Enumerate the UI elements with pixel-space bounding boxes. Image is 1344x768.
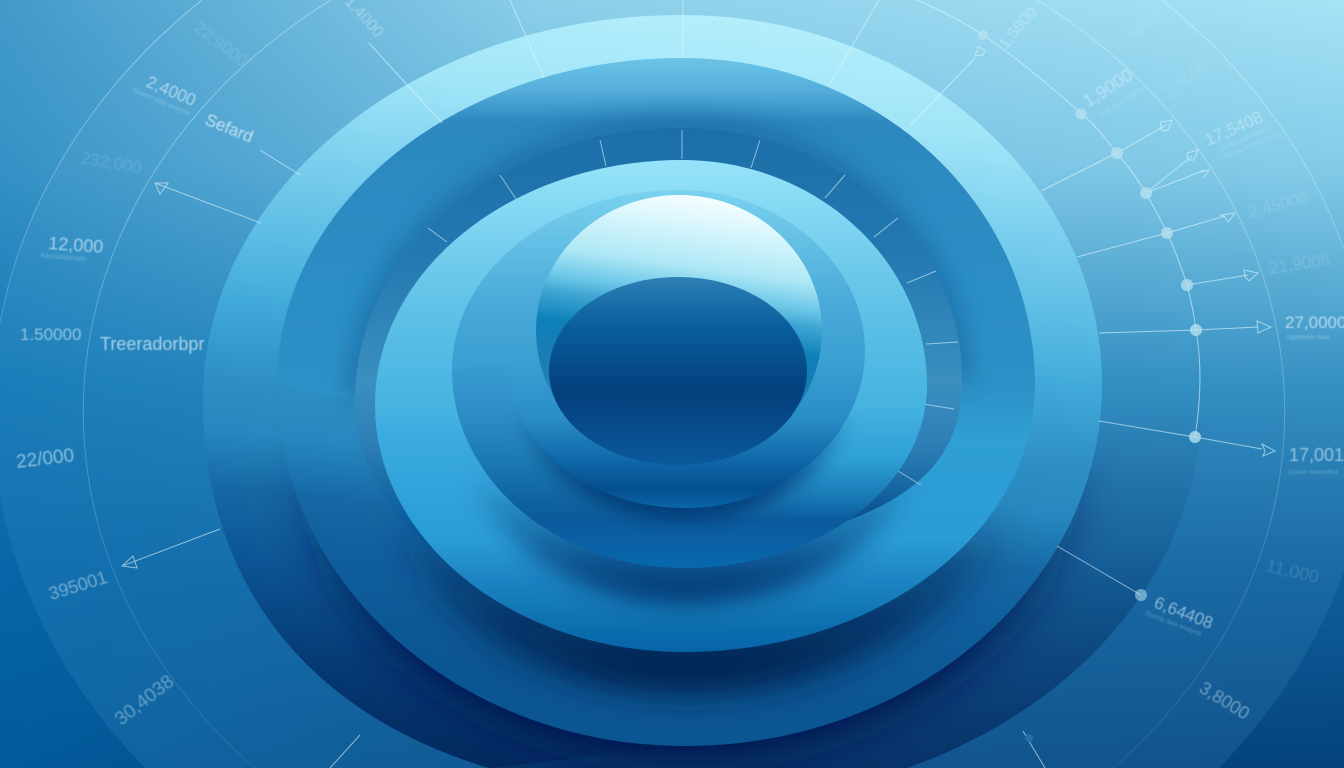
right value labels (1079, 5, 1344, 724)
label 2,4000: Reason data analysis (131, 87, 192, 118)
lower left crescent of layer 3 (452, 355, 685, 568)
label 11,000 faint: 11,000 (1264, 555, 1321, 587)
connector lines (1041, 125, 1262, 595)
top value labels (341, 0, 1041, 53)
layer 4: inner ribbon (452, 190, 865, 508)
left value labels (15, 18, 256, 730)
label 27,0000 (1285, 313, 1344, 341)
label 17,5408: 17,5408 (1202, 107, 1266, 150)
label 17,0011: Cause eventsfirst (1288, 469, 1338, 476)
label 17,5408: Cause data analysis (1224, 130, 1281, 161)
label 17,5408 (1202, 104, 1281, 165)
label Treeradorbpr: Treeradorbpr (100, 334, 204, 354)
lower left arrow (122, 529, 220, 568)
outer band edge lines (0, 0, 1344, 323)
groove top shadow (345, 114, 972, 400)
label 1,5800 top right: 1,5800 (996, 4, 1041, 53)
label 232,000 faint: 232,000 (79, 148, 143, 178)
dark groove ring (355, 128, 962, 556)
lower dark spiral band (203, 400, 1202, 768)
label 2,45008 faint: 2,45008 (1246, 188, 1310, 222)
connector to Sefard label (260, 150, 300, 175)
label 6,64408: 6,64408 (1152, 593, 1216, 633)
label 12,000: Rasoudatanaps (40, 253, 87, 263)
label 395001: 395001 (46, 567, 110, 604)
layer 2: medium ribbon (277, 58, 1035, 652)
faint top label: 1,5000 (1112, 5, 1164, 53)
label 17,0011 (1288, 445, 1344, 476)
dark sphere core (549, 277, 807, 465)
label 27,0000: Upstream data (1287, 334, 1330, 341)
label 30,4038: 30,4038 (111, 671, 178, 730)
top radial lines (369, 0, 975, 126)
label 2,4000 (131, 68, 200, 118)
label Sefard: Sefard (203, 110, 256, 146)
bottom connector (330, 731, 1045, 768)
label 1,9000 (1079, 62, 1147, 122)
layer 3: bright ribbon (375, 160, 927, 568)
label 1,9000: 1,9000 (1079, 65, 1136, 111)
label 22,9000 faint top: 22,9000 (191, 18, 251, 70)
timeline curve (917, 0, 1200, 437)
left connector lines and arrows (122, 150, 300, 568)
data dots (978, 30, 1202, 601)
label 1,9000: Sub data analysis (1099, 84, 1147, 118)
layer 4 cast shadow (508, 362, 865, 520)
central sphere (536, 195, 822, 467)
upper left arrow (155, 183, 261, 223)
layer 3 cast shadow (452, 406, 927, 604)
label 1.50000: 1.50000 (20, 325, 81, 344)
label 17,5408: Cause data analysis (1218, 123, 1275, 153)
right timeline with dots and arrows (917, 0, 1275, 601)
layer 2 cast shadow (375, 427, 1035, 694)
label 2,4000: 2,4000 (143, 72, 199, 110)
groove tick marks (428, 130, 958, 485)
faint label 1,5000: 1,5000 (1160, 55, 1212, 103)
lower left crescent of layer 2 (375, 360, 685, 652)
label 22/000: 22/000 (15, 445, 75, 473)
label 3,8000: 3,8000 (1196, 677, 1253, 724)
label 12,000: 12,000 (48, 233, 104, 257)
label 21,9008 faint: 21,9008 (1268, 250, 1331, 278)
left crescent of outer ribbon (203, 384, 685, 768)
layer 1: outer light ribbon (203, 15, 1102, 746)
label 6,64408: Dosing data analysis (1144, 610, 1203, 638)
label 12,000 (40, 233, 104, 264)
spiral ribbon layers (203, 15, 1102, 768)
arrowheads (975, 47, 1275, 456)
outer ribbon cast shadow (277, 398, 1102, 760)
